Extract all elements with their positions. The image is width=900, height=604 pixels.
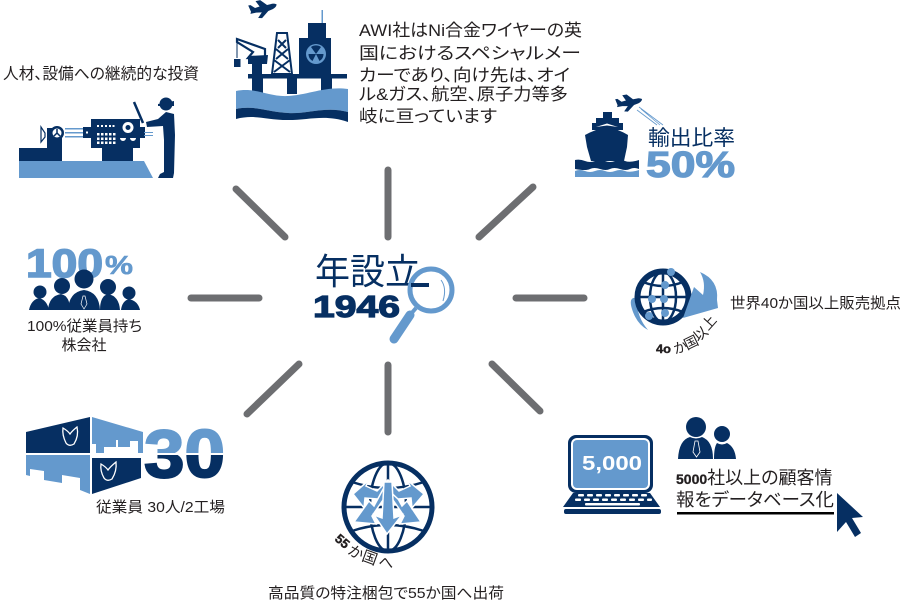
- panel: central founding year: [313, 251, 452, 339]
- text: 40 countries curved label: 4o: [656, 344, 671, 356]
- panel: export ratio 50%: [575, 92, 735, 185]
- panel: shipping to 55 countries: [268, 463, 504, 602]
- text block: company description: [359, 21, 582, 126]
- text: employees caption: 従業員 30人/2工場: [96, 499, 225, 516]
- icon: laptop 5,000: [563, 435, 661, 514]
- text: investment caption: 人材、設備への継続的な投資: [3, 65, 199, 83]
- icon: five employees: [29, 270, 140, 310]
- icon: mouse cursor: [837, 493, 863, 537]
- panel: oil, aerospace, nuclear: [234, 0, 582, 126]
- panel: 30 employees and 2 factories: [26, 416, 225, 516]
- text block: company description: AWI社はNi合金ワイヤーの英: [359, 21, 582, 40]
- text: 40 countries curved label: 国: [681, 332, 701, 353]
- text: 40 countries curved label: 以: [690, 323, 711, 344]
- icon: lathe operator: [19, 98, 175, 178]
- panel: sales in 40 countries: [631, 268, 900, 357]
- panel: 100% employee owned: [26, 242, 142, 354]
- icon: cargo ship: [575, 112, 639, 177]
- icon: offshore rig: [234, 10, 348, 122]
- text: employee owned caption: 100%従業員持ち: [27, 318, 142, 335]
- figure: 100%: %: [105, 250, 133, 280]
- text: 40 countries curved label: か: [672, 338, 689, 357]
- text: customer database caption: 5000社以上の顧客情: [676, 468, 833, 488]
- text: 55 countries curved label: へ: [378, 554, 395, 573]
- text: employee owned caption: [27, 318, 142, 354]
- text: shipping caption: 高品質の特注梱包で55か国へ出荷: [268, 584, 504, 602]
- year 1946: 1946: [313, 289, 400, 324]
- text block: company description: ル&ガス、航空、原子力等多: [359, 85, 568, 104]
- heading: export ratio: 輸出比率: [648, 127, 735, 150]
- figure: 30 two-tone: 30: [144, 416, 225, 492]
- text: customer database caption: [676, 468, 834, 510]
- figure: 30 two-tone: [144, 428, 224, 479]
- text: 55 countries curved label: 55: [332, 531, 353, 552]
- figure: 30 two-tone: 30: [144, 416, 225, 492]
- text: customer database caption: 報をデータベース化: [676, 490, 834, 510]
- text: 55 countries curved label: か: [345, 542, 366, 564]
- text: world 40 countries caption: 世界40か国以上販売拠点: [730, 295, 900, 312]
- radial spokes: [191, 170, 584, 432]
- text: 40 countries curved label: 上: [698, 312, 720, 333]
- text block: company description: カーであり、向け先は、オイ: [359, 66, 570, 85]
- icon: globe with arrow: [631, 268, 718, 330]
- text block: company description: 国におけるスペシャルメー: [359, 44, 581, 63]
- icon: airplane with trails: [615, 92, 663, 125]
- icon: two business people: [678, 417, 736, 459]
- icon: globe with outward arrows: [344, 463, 432, 551]
- figure: 100%: [26, 242, 133, 286]
- text: employee owned caption: 株会社: [61, 337, 107, 354]
- panel: customer database: [563, 417, 863, 537]
- text: 40 countries curved label: [656, 312, 720, 357]
- icon: laptop 5,000: 5,000: [582, 453, 642, 475]
- icon: airplane: [248, 0, 279, 20]
- icon: factory roofs: [26, 417, 143, 494]
- heading: founded: 年設立: [315, 251, 420, 292]
- text: 55 countries curved label: 国: [360, 548, 380, 569]
- text: 55 countries curved label: [332, 531, 395, 573]
- figure: 100%: 100: [26, 242, 103, 286]
- text block: company description: 岐に亘っています: [359, 107, 497, 126]
- panel: investment in people and equipment: [3, 65, 199, 178]
- figure: 50%: 50%: [646, 144, 735, 185]
- icon: magnifying glass: [394, 269, 452, 339]
